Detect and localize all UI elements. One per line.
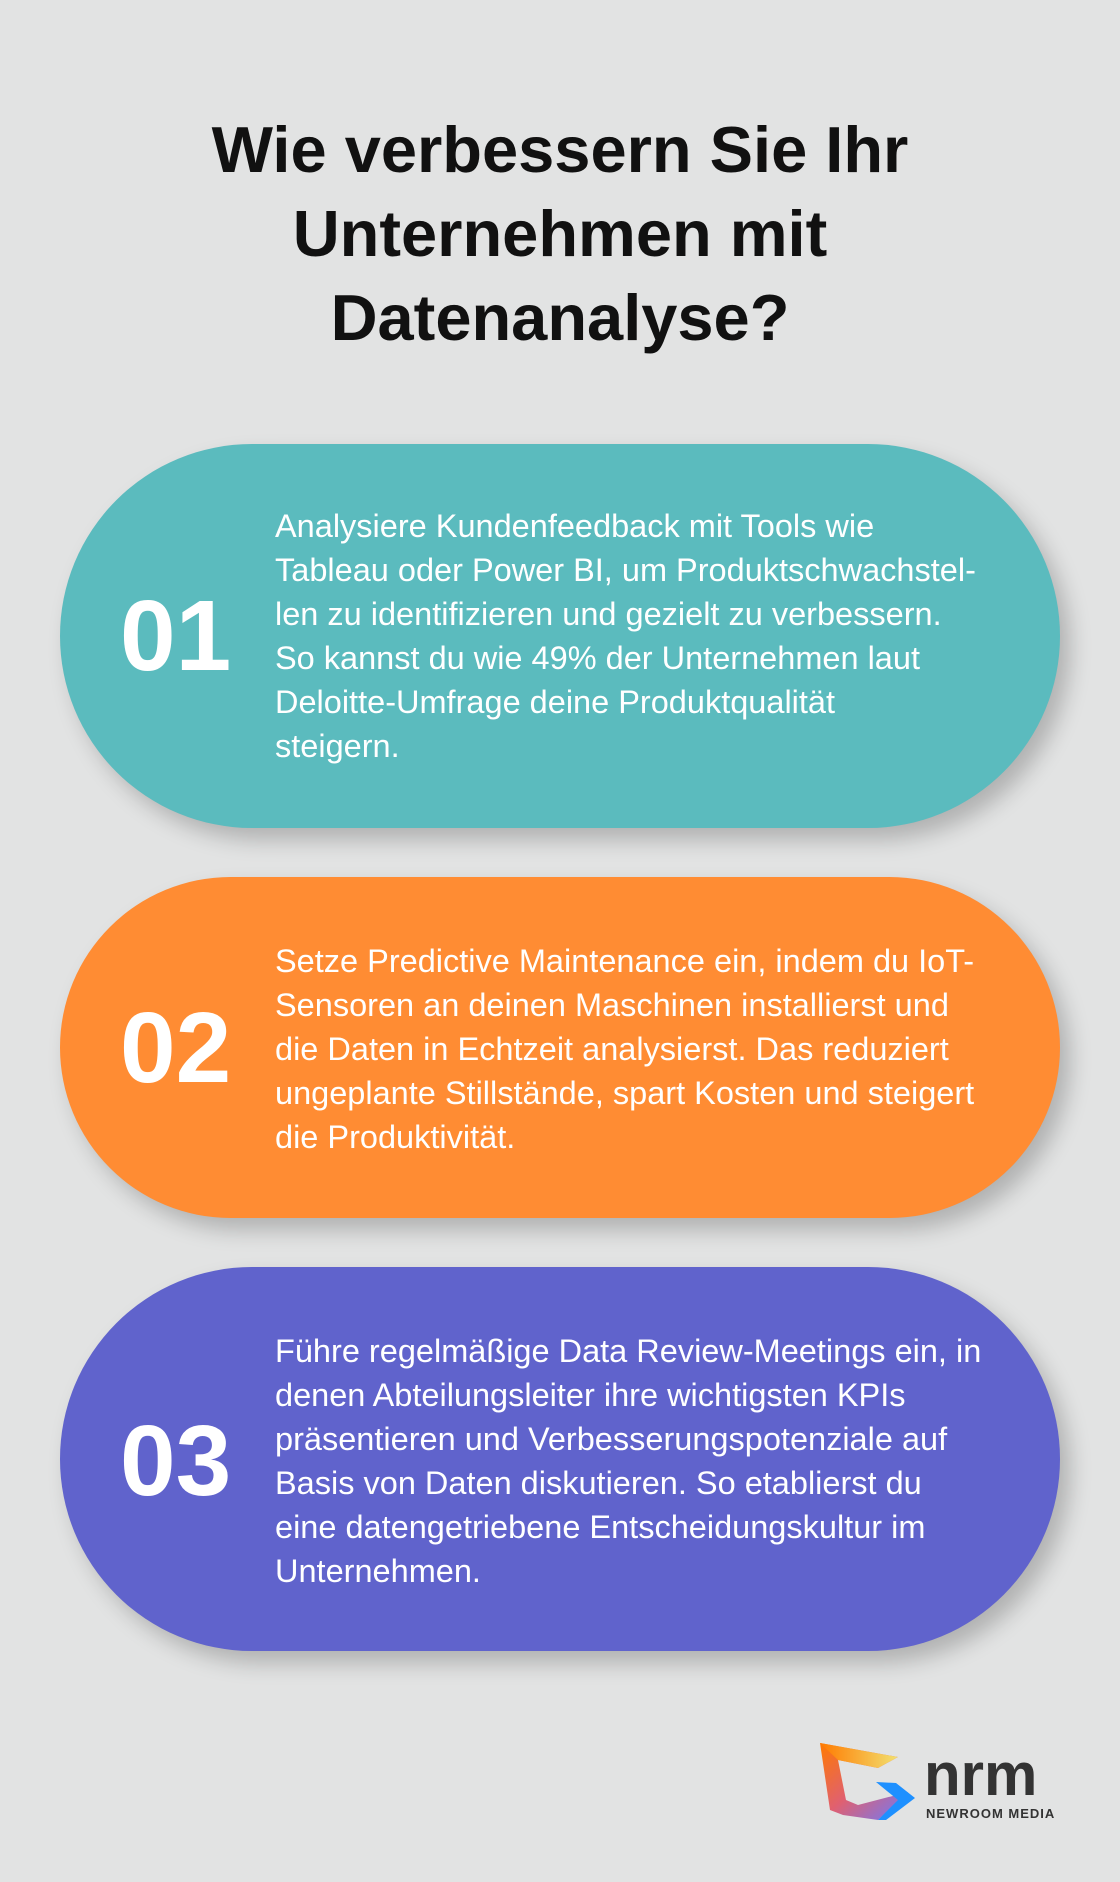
text 01: Tableau oder Power BI, um Produktschwachstel- xyxy=(275,552,976,588)
panel: step 01 xyxy=(60,444,1060,828)
text 01 xyxy=(275,508,976,764)
number 02: 02 xyxy=(120,992,231,1104)
number 01: 01 xyxy=(120,580,231,692)
text 03: präsentieren und Verbesserungspotenziale auf xyxy=(275,1421,947,1457)
text 02: die Produktivität. xyxy=(275,1119,515,1155)
text 02: Setze Predictive Maintenance ein, indem du IoT- xyxy=(275,943,974,979)
logo: NEWROOM MEDIA xyxy=(926,1806,1055,1821)
logo xyxy=(820,1741,1055,1821)
text 03: Unternehmen. xyxy=(275,1553,481,1589)
title: Datenanalyse? xyxy=(331,281,789,354)
number 03: 03 xyxy=(120,1405,231,1517)
text 03: eine datengetriebene Entscheidungskultur im xyxy=(275,1509,925,1545)
text 03: Basis von Daten diskutieren. So etablierst du xyxy=(275,1465,922,1501)
text 03: denen Abteilungsleiter ihre wichtigsten KPIs xyxy=(275,1377,906,1413)
title xyxy=(212,113,908,354)
text 02: Sensoren an deinen Maschinen installierst und xyxy=(275,987,949,1023)
text 03: Führe regelmäßige Data Review-Meetings ein, in xyxy=(275,1333,981,1369)
logo text: nrm xyxy=(924,1741,1037,1808)
icon: logo mark xyxy=(820,1743,915,1820)
text 02: ungeplante Stillstände, spart Kosten und steigert xyxy=(275,1075,974,1111)
text 01: steigern. xyxy=(275,728,400,764)
text 02 xyxy=(275,943,974,1155)
text 01: Deloitte-Umfrage deine Produktqualität xyxy=(275,684,835,720)
panel: step 03 xyxy=(60,1267,1060,1651)
text 02: die Daten in Echtzeit analysierst. Das reduziert xyxy=(275,1031,949,1067)
title: Wie verbessern Sie Ihr xyxy=(212,113,908,186)
text 03 xyxy=(275,1333,981,1589)
panel: step 02 xyxy=(60,877,1060,1218)
text 01: Analysiere Kundenfeedback mit Tools wie xyxy=(275,508,874,544)
text 01: So kannst du wie 49% der Unternehmen laut xyxy=(275,640,920,676)
title: Unternehmen mit xyxy=(293,197,827,270)
text 01: len zu identifizieren und gezielt zu verbessern. xyxy=(275,596,942,632)
